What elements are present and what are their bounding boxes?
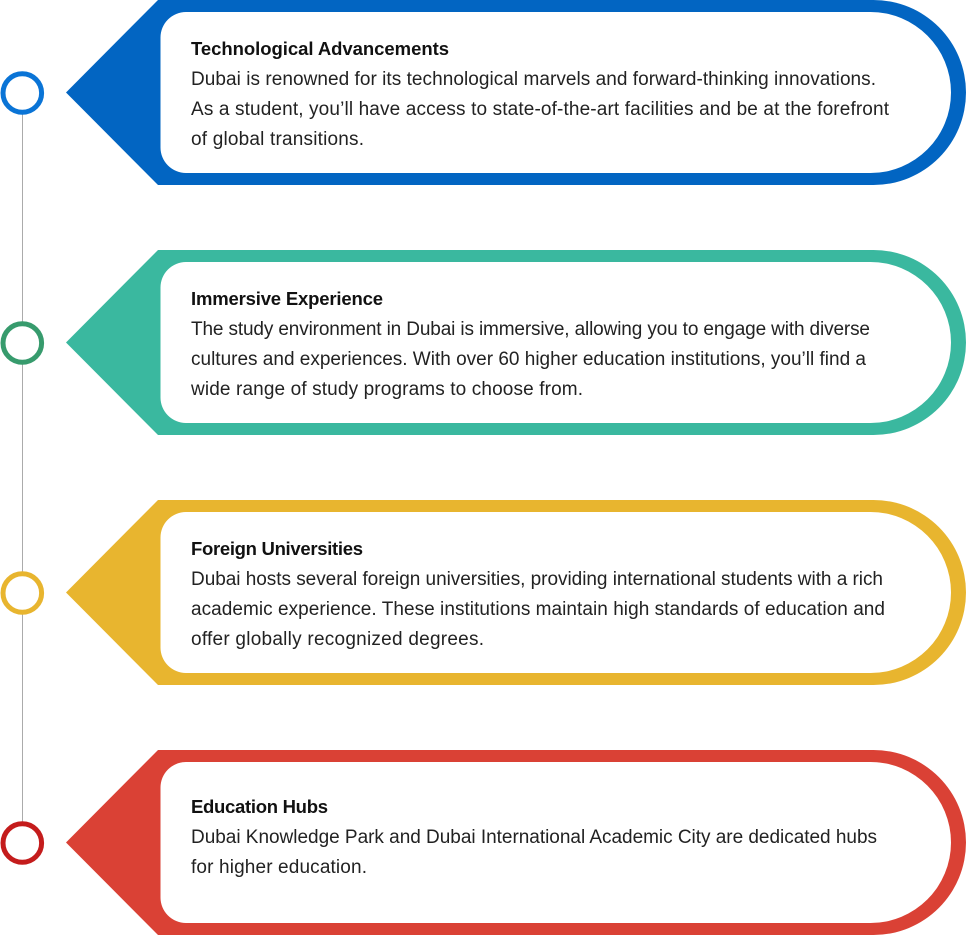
body text: of global transitions. (191, 129, 364, 150)
body text: Dubai Knowledge Park and Dubai International Academic City are dedicated hubs (191, 827, 877, 848)
arrow card shape (66, 0, 966, 185)
card inner (160, 762, 951, 923)
timeline line (22, 112, 23, 824)
body text (191, 827, 877, 878)
body text: As a student, you’ll have access to state-of-the-art facilities and be at the forefront (191, 99, 890, 120)
panel: Education Hubs (66, 750, 966, 935)
heading: Technological Advancements (191, 38, 449, 59)
body text: cultures and experiences. With over 60 higher education institutions, you’ll find a (191, 349, 866, 370)
body text: Dubai is renowned for its technological marvels and forward-thinking innovations. (191, 69, 876, 90)
arrow card shape (66, 250, 966, 435)
arrow card shape (66, 750, 966, 935)
body text (191, 69, 890, 150)
body text: academic experience. These institutions maintain high standards of education and (191, 599, 885, 620)
card inner (160, 512, 951, 673)
body text: Dubai hosts several foreign universities, providing international students with a rich (191, 569, 883, 590)
panel: Foreign Universities (66, 500, 966, 685)
timeline marker 2 (3, 324, 42, 362)
body text: for higher education. (191, 857, 367, 878)
timeline marker 1 (3, 74, 42, 112)
panel: Technological Advancements (66, 0, 966, 185)
panel: Immersive Experience (66, 250, 966, 435)
body text: wide range of study programs to choose from. (190, 379, 583, 400)
body text (191, 569, 885, 650)
card inner (160, 12, 951, 173)
body text: offer globally recognized degrees. (191, 629, 484, 650)
arrow card shape (66, 500, 966, 685)
body text (190, 319, 870, 400)
heading: Immersive Experience (191, 288, 383, 309)
heading: Education Hubs (191, 796, 328, 817)
timeline marker 3 (3, 574, 42, 612)
heading: Foreign Universities (191, 538, 363, 559)
body text: The study environment in Dubai is immersive, allowing you to engage with diverse (191, 319, 870, 340)
card inner (160, 262, 951, 423)
timeline marker 4 (3, 824, 42, 862)
